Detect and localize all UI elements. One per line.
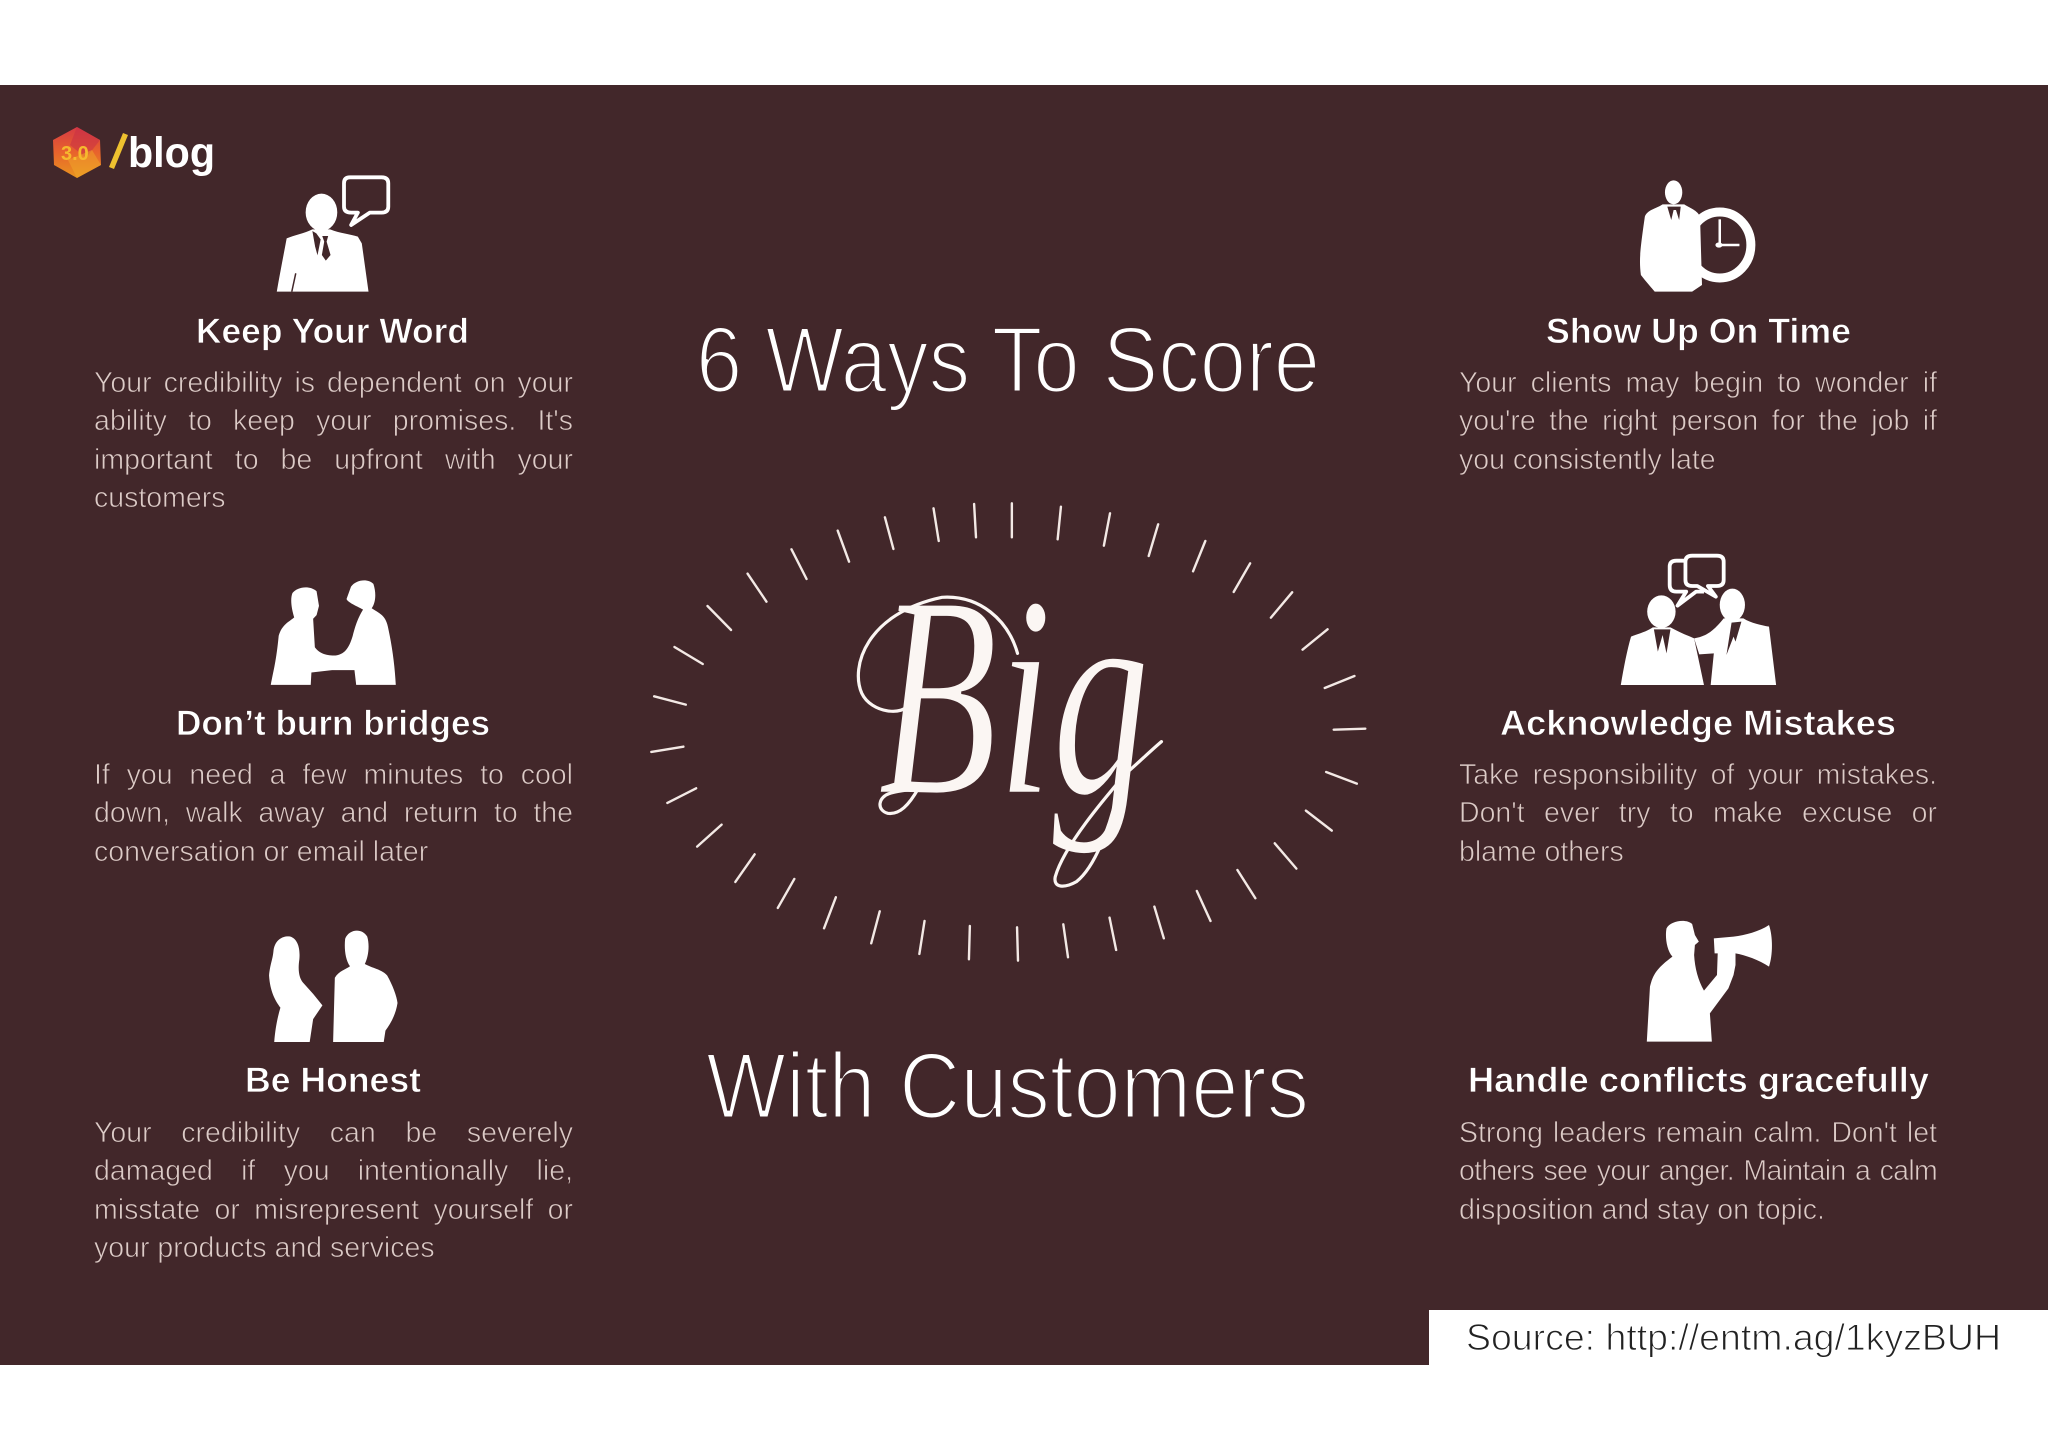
text block: Be Honest: Your credibility can be severely (94, 1117, 573, 1149)
icon: two businessmen with speech bubbles (1621, 556, 1776, 685)
text block: Keep Your Word (94, 364, 573, 520)
text block: Acknowledge Mistakes: Take responsibility of your mistakes. (1459, 759, 1937, 791)
heading: Keep Your Word: Keep Your Word (196, 312, 469, 351)
panel: Handle conflicts gracefully (1459, 921, 1937, 1232)
text block: Show Up On Time: you're the right person for the job if (1459, 405, 1937, 437)
heading: Acknowledge Mistakes: Acknowledge Mistakes (1500, 704, 1896, 743)
logo: 3.0 (61, 143, 89, 165)
panel: Acknowledge Mistakes (1459, 556, 1937, 874)
icon: two people shaking hands (271, 580, 396, 685)
text block: Handle conflicts gracefully: others see your anger. Maintain a calm (1459, 1155, 1937, 1187)
text block: Be Honest: your products and services (94, 1232, 435, 1264)
logo (53, 127, 215, 178)
text block: Handle conflicts gracefully (1459, 1114, 1937, 1232)
decorative script flourishes (858, 597, 1161, 886)
text block: Be Honest (94, 1114, 573, 1270)
icon: man with megaphone (1647, 921, 1772, 1042)
text block: Handle conflicts gracefully: Strong leaders remain calm. Don't let (1459, 1117, 1937, 1149)
panel: Show Up On Time (1459, 180, 1937, 482)
text block: Handle conflicts gracefully: disposition and stay on topic. (1459, 1194, 1825, 1226)
icon: businessman with speech bubble (277, 177, 388, 292)
text block: Don't burn bridges: conversation or email later (94, 836, 428, 868)
sunburst ticks around Big (651, 503, 1365, 961)
heading: Be Honest: Be Honest (245, 1061, 421, 1100)
text block: Don't burn bridges: down, walk away and return to the (94, 797, 573, 829)
text block: Show Up On Time: you consistently late (1459, 444, 1716, 476)
text block: Keep Your Word: customers (94, 482, 225, 514)
text block: Show Up On Time: Your clients may begin to wonder if (1459, 367, 1937, 399)
panel: Don't burn bridges (94, 580, 573, 874)
panel: Be Honest (94, 931, 573, 1270)
heading: Handle conflicts gracefully: Handle conflicts gracefully (1468, 1061, 1930, 1100)
text block: Don't burn bridges: If you need a few minutes to cool (94, 759, 573, 791)
icon: woman and man silhouettes (269, 931, 398, 1042)
text block: Keep Your Word: ability to keep your promises. It's (94, 405, 573, 437)
text block: Acknowledge Mistakes: Don't ever try to make excuse or (1459, 797, 1937, 829)
text block: Keep Your Word: Your credibility is dependent on your (94, 367, 573, 399)
text block: Don't burn bridges (94, 756, 573, 874)
heading: Don't burn bridges: Don’t burn bridges (176, 704, 490, 743)
text block: Acknowledge Mistakes: blame others (1459, 836, 1624, 868)
icon: businessman with clock (1640, 180, 1751, 292)
panel: Keep Your Word (94, 177, 573, 520)
center word: Big: Big (878, 537, 1150, 856)
heading: Show Up On Time: Show Up On Time (1546, 312, 1851, 351)
text block: Keep Your Word: important to be upfront with your (94, 444, 573, 476)
text block: Be Honest: damaged if you intentionally lie, (94, 1155, 573, 1187)
title: With Customers: With Customers (706, 1033, 1309, 1138)
text block: Acknowledge Mistakes (1459, 756, 1937, 874)
source box (1429, 1310, 2048, 1365)
source box: Source: http://entm.ag/1kyzBUH (1466, 1317, 2001, 1358)
center word: Big (858, 537, 1161, 886)
text block: Be Honest: misstate or misrepresent yourself or (94, 1194, 573, 1226)
title: 6 Ways To Score: 6 Ways To Score (696, 307, 1320, 412)
text block: Show Up On Time (1459, 364, 1937, 482)
logo: blog (128, 129, 215, 177)
